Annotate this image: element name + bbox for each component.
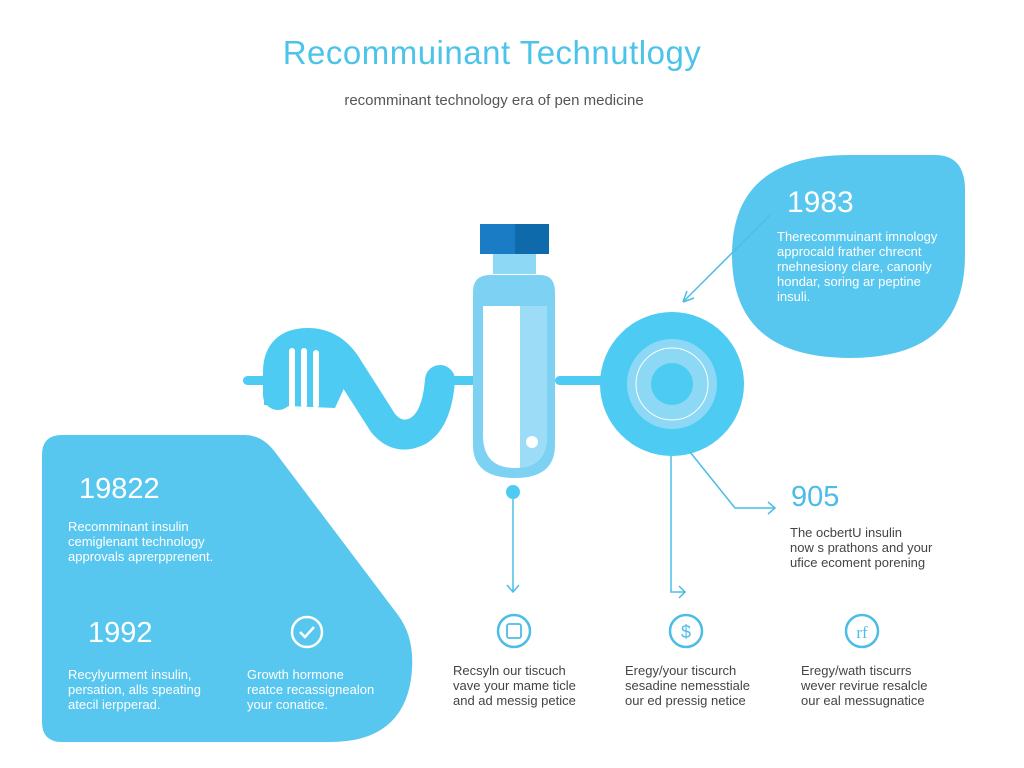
text: sesadine nemesstiale (625, 678, 750, 693)
bottom text blocks: and ad messig petice (453, 693, 576, 708)
text: Recylyurment insulin, (68, 667, 192, 682)
text: our eal messugnatice (801, 693, 925, 708)
panel: left 1982/1992 (42, 435, 412, 742)
text: approvals aprerpprenent. (68, 549, 213, 564)
illustration: $ (681, 622, 691, 642)
text: approcald frather chrecnt (777, 244, 922, 259)
text: persation, alls speating (68, 682, 201, 697)
panel: 1983 bubble (732, 155, 965, 358)
title: Recommuinant Technutlogy (283, 34, 701, 71)
text: reatce recassignealon (247, 682, 374, 697)
text: The ocbertU insulin (790, 525, 902, 540)
text: Recomminant insulin (68, 519, 189, 534)
text: Eregy/your tiscurch (625, 663, 736, 678)
text: wever revirue resalcle (801, 678, 927, 693)
icons (292, 615, 878, 647)
text: 905: 905 (791, 481, 839, 513)
text: hondar, soring ar peptine (777, 274, 921, 289)
subtitle: recomminant technology era of pen medicine (344, 92, 644, 109)
bottom text blocks (453, 663, 576, 708)
connectors (506, 452, 775, 598)
text: 1992: 1992 (88, 617, 153, 649)
DNA wave (243, 330, 615, 435)
text: your conatice. (247, 697, 328, 712)
text: cemiglenant technology (68, 534, 205, 549)
text: 1983: 1983 (787, 186, 854, 219)
text: our ed pressig netice (625, 693, 746, 708)
arrow: 1983 to circle (683, 215, 770, 302)
text: atecil ierpperad. (68, 697, 160, 712)
text: 19822: 19822 (79, 473, 160, 505)
text: Growth hormone (247, 667, 344, 682)
text: now s prathons and your (790, 540, 932, 555)
text: ufice ecoment porening (790, 555, 925, 570)
text: insuli. (777, 289, 810, 304)
bottom text blocks: vave your mame ticle (453, 678, 576, 693)
illustration: rf (856, 623, 868, 642)
text: Eregy/wath tiscurrs (801, 663, 912, 678)
text: rnehnesiony clare, canonly (777, 259, 932, 274)
target circle (600, 312, 744, 456)
bottom text blocks: Recsyln our tiscuch (453, 663, 566, 678)
text: Therecommuinant imnology (777, 229, 937, 244)
vial (473, 224, 555, 478)
